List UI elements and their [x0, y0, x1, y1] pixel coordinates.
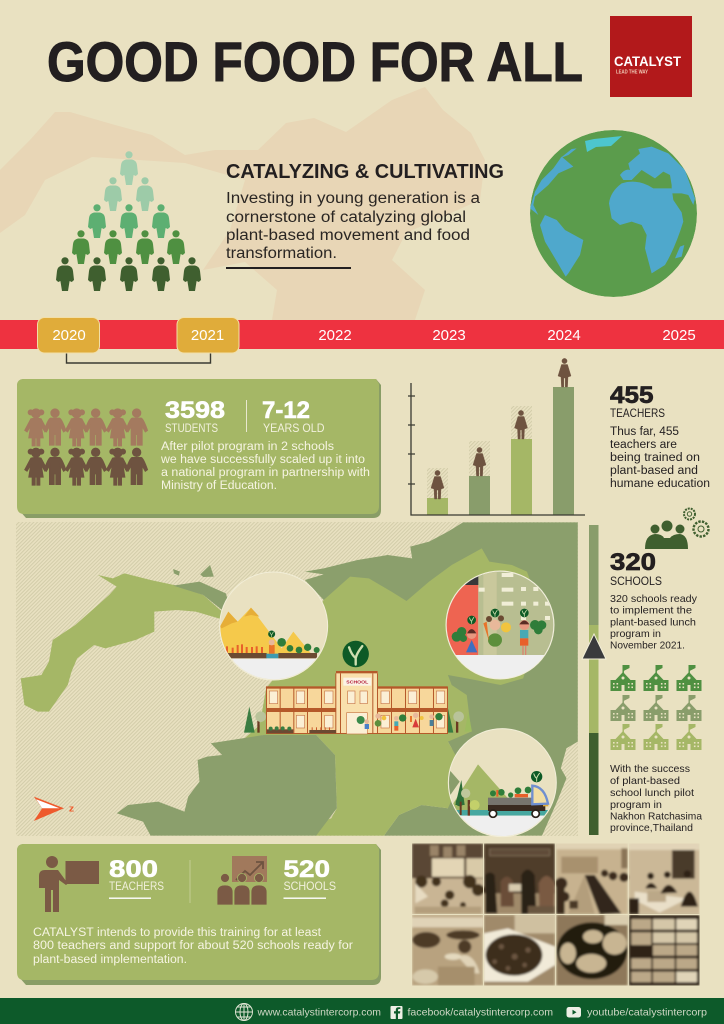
stat: 320 schools [610, 549, 698, 652]
text: target description: plant-based implementation. [33, 954, 187, 966]
year labels: 2021 [191, 327, 224, 344]
stat: 520 schools: 520 [284, 856, 330, 883]
stat: 320 schools: November 2021. [610, 640, 685, 652]
text: pilot success: school lunch pilot [610, 787, 694, 799]
school children [357, 713, 443, 731]
stat: 455 teachers: being trained on [610, 452, 700, 464]
photo: long conference table [555, 843, 629, 914]
stat: 455 teachers: teachers are [610, 439, 677, 451]
logo: Catalyst: CATALYST [614, 53, 681, 69]
year labels: 2025 [662, 327, 696, 344]
icon: group with gears [645, 508, 708, 549]
icon: youtube [566, 1007, 581, 1018]
stat: 800 teachers: 800 [109, 856, 158, 883]
text: intro paragraph: transformation. [226, 245, 337, 262]
school trees [244, 707, 472, 733]
text: pilot success: Nakhon Ratchasima [610, 810, 702, 822]
year labels: 2020 [52, 327, 86, 344]
logo: Catalyst [610, 16, 692, 97]
stat: 320 schools: SCHOOLS [610, 574, 662, 588]
text: pilot success: program in [610, 799, 662, 811]
vignette: delivery truck [443, 729, 563, 839]
timeline bar [0, 318, 724, 363]
icon: sprout badge [342, 641, 369, 667]
text: pilot success: province,Thailand [610, 822, 693, 834]
divider [190, 860, 191, 903]
stat: 7-12 years old: 7-12 [262, 397, 310, 424]
photo: stir-fried dish [484, 915, 555, 986]
panel: targets [17, 844, 381, 985]
timeline connector bracket [66, 352, 210, 363]
icon: globe [530, 130, 697, 297]
illustration: school building [244, 671, 472, 734]
compass [34, 797, 74, 821]
stat: 455 teachers: Thus far, 455 [610, 426, 679, 438]
stat: 320 schools: 320 schools ready [610, 593, 698, 605]
photo: meeting room [412, 843, 484, 914]
stat: 320 schools: program in [610, 628, 661, 640]
chart hatch backdrops [427, 406, 532, 498]
stat: 455 teachers: 455 [610, 382, 654, 409]
stat: 7-12 years old [262, 397, 325, 435]
text: scale-up description: we have successfully scaled up it into [160, 454, 365, 466]
photo: bowl dish [556, 915, 628, 986]
vignette: city children [445, 570, 557, 679]
stat: 455 teachers: TEACHERS [610, 406, 665, 420]
stat: 7-12 years old: YEARS OLD [263, 421, 325, 435]
stat: 3598 students [165, 397, 225, 435]
text: pilot success [610, 763, 702, 834]
text: scale-up description: a national program in partnership with [161, 467, 370, 479]
text: pilot success: With the success [610, 763, 690, 775]
text: intro paragraph: cornerstone of catalyzing global [226, 209, 466, 226]
icon: people pyramid [56, 151, 201, 291]
panel: map [16, 522, 578, 839]
bar chart: teachers trained [408, 358, 585, 515]
stat: 455 teachers: plant-based and [610, 465, 698, 477]
map landmass [21, 522, 578, 836]
year labels: 2023 [432, 327, 466, 344]
text: scale-up description: After pilot program in 2 schools [161, 441, 334, 453]
stat: 800 teachers [109, 856, 164, 899]
photo grid [412, 843, 700, 986]
stat: 800 teachers: TEACHERS [109, 879, 164, 893]
stat: 3598 students: STUDENTS [165, 421, 218, 435]
text: intro paragraph: plant-based movement and food [226, 227, 470, 244]
photo: food hall [412, 915, 483, 986]
stat: 520 schools [284, 856, 336, 899]
icon: facebook [390, 1006, 402, 1019]
school garden [267, 726, 336, 733]
timeline side bar [582, 525, 606, 835]
panel: students [17, 379, 381, 518]
website link: www.catalystintercorp.com [257, 1006, 381, 1018]
icon: growth chart with people [217, 856, 267, 905]
stat: 3598 students: 3598 [165, 397, 225, 424]
text: scale-up description: Ministry of Education. [161, 480, 277, 492]
text: target description [33, 927, 353, 966]
text: intro paragraph [226, 190, 480, 269]
background map silhouette [0, 87, 485, 320]
photo: small meeting [629, 843, 700, 914]
title: GOOD FOOD FOR ALL [47, 30, 583, 93]
school windows [269, 691, 445, 734]
stat: 320 schools: 320 [610, 549, 656, 576]
school sign [343, 678, 371, 686]
school sign: SCHOOL [346, 680, 368, 686]
year labels: 2024 [547, 327, 581, 344]
year button 2020 [38, 318, 100, 353]
footer bar [0, 998, 724, 1024]
facebook link: facebook/catalystintercorp.com [408, 1006, 553, 1018]
teacher figures [431, 358, 571, 499]
icon: globe [236, 1004, 252, 1020]
compass: z [69, 804, 74, 814]
stat: 520 schools: SCHOOLS [284, 879, 336, 893]
icon: children row [25, 409, 147, 485]
text: target description: 800 teachers and support for about 520 schools ready for [33, 940, 353, 952]
photo: video conference screen [629, 915, 700, 986]
vignette: farm field [215, 572, 335, 682]
logo: Catalyst: LEAD THE WAY [616, 70, 649, 76]
text: pilot success: of plant-based [610, 775, 680, 787]
side bar marker [582, 634, 606, 659]
children with vegetables [452, 609, 546, 655]
text: scale-up description [160, 441, 370, 492]
icon: teacher at board [39, 856, 99, 912]
stat: 455 teachers [610, 382, 710, 490]
photo: handover ceremony [484, 843, 555, 914]
stat: 455 teachers: humane education [610, 478, 710, 490]
divider [246, 400, 247, 432]
stat: 320 schools: to implement the [610, 604, 692, 616]
stat: 320 schools: plant-based lunch [610, 616, 696, 628]
text: intro paragraph: Investing in young generation is a [226, 190, 480, 207]
year button 2021 [177, 318, 239, 353]
youtube link: youtube/catalystintercorp [587, 1006, 707, 1018]
icon grid: schools [610, 665, 702, 750]
year labels: 2022 [318, 327, 352, 344]
heading: catalyzing and cultivating: CATALYZING & CULTIVATING [226, 161, 504, 183]
year labels [52, 327, 696, 344]
text: target description: CATALYST intends to provide this training for at least [33, 927, 322, 939]
